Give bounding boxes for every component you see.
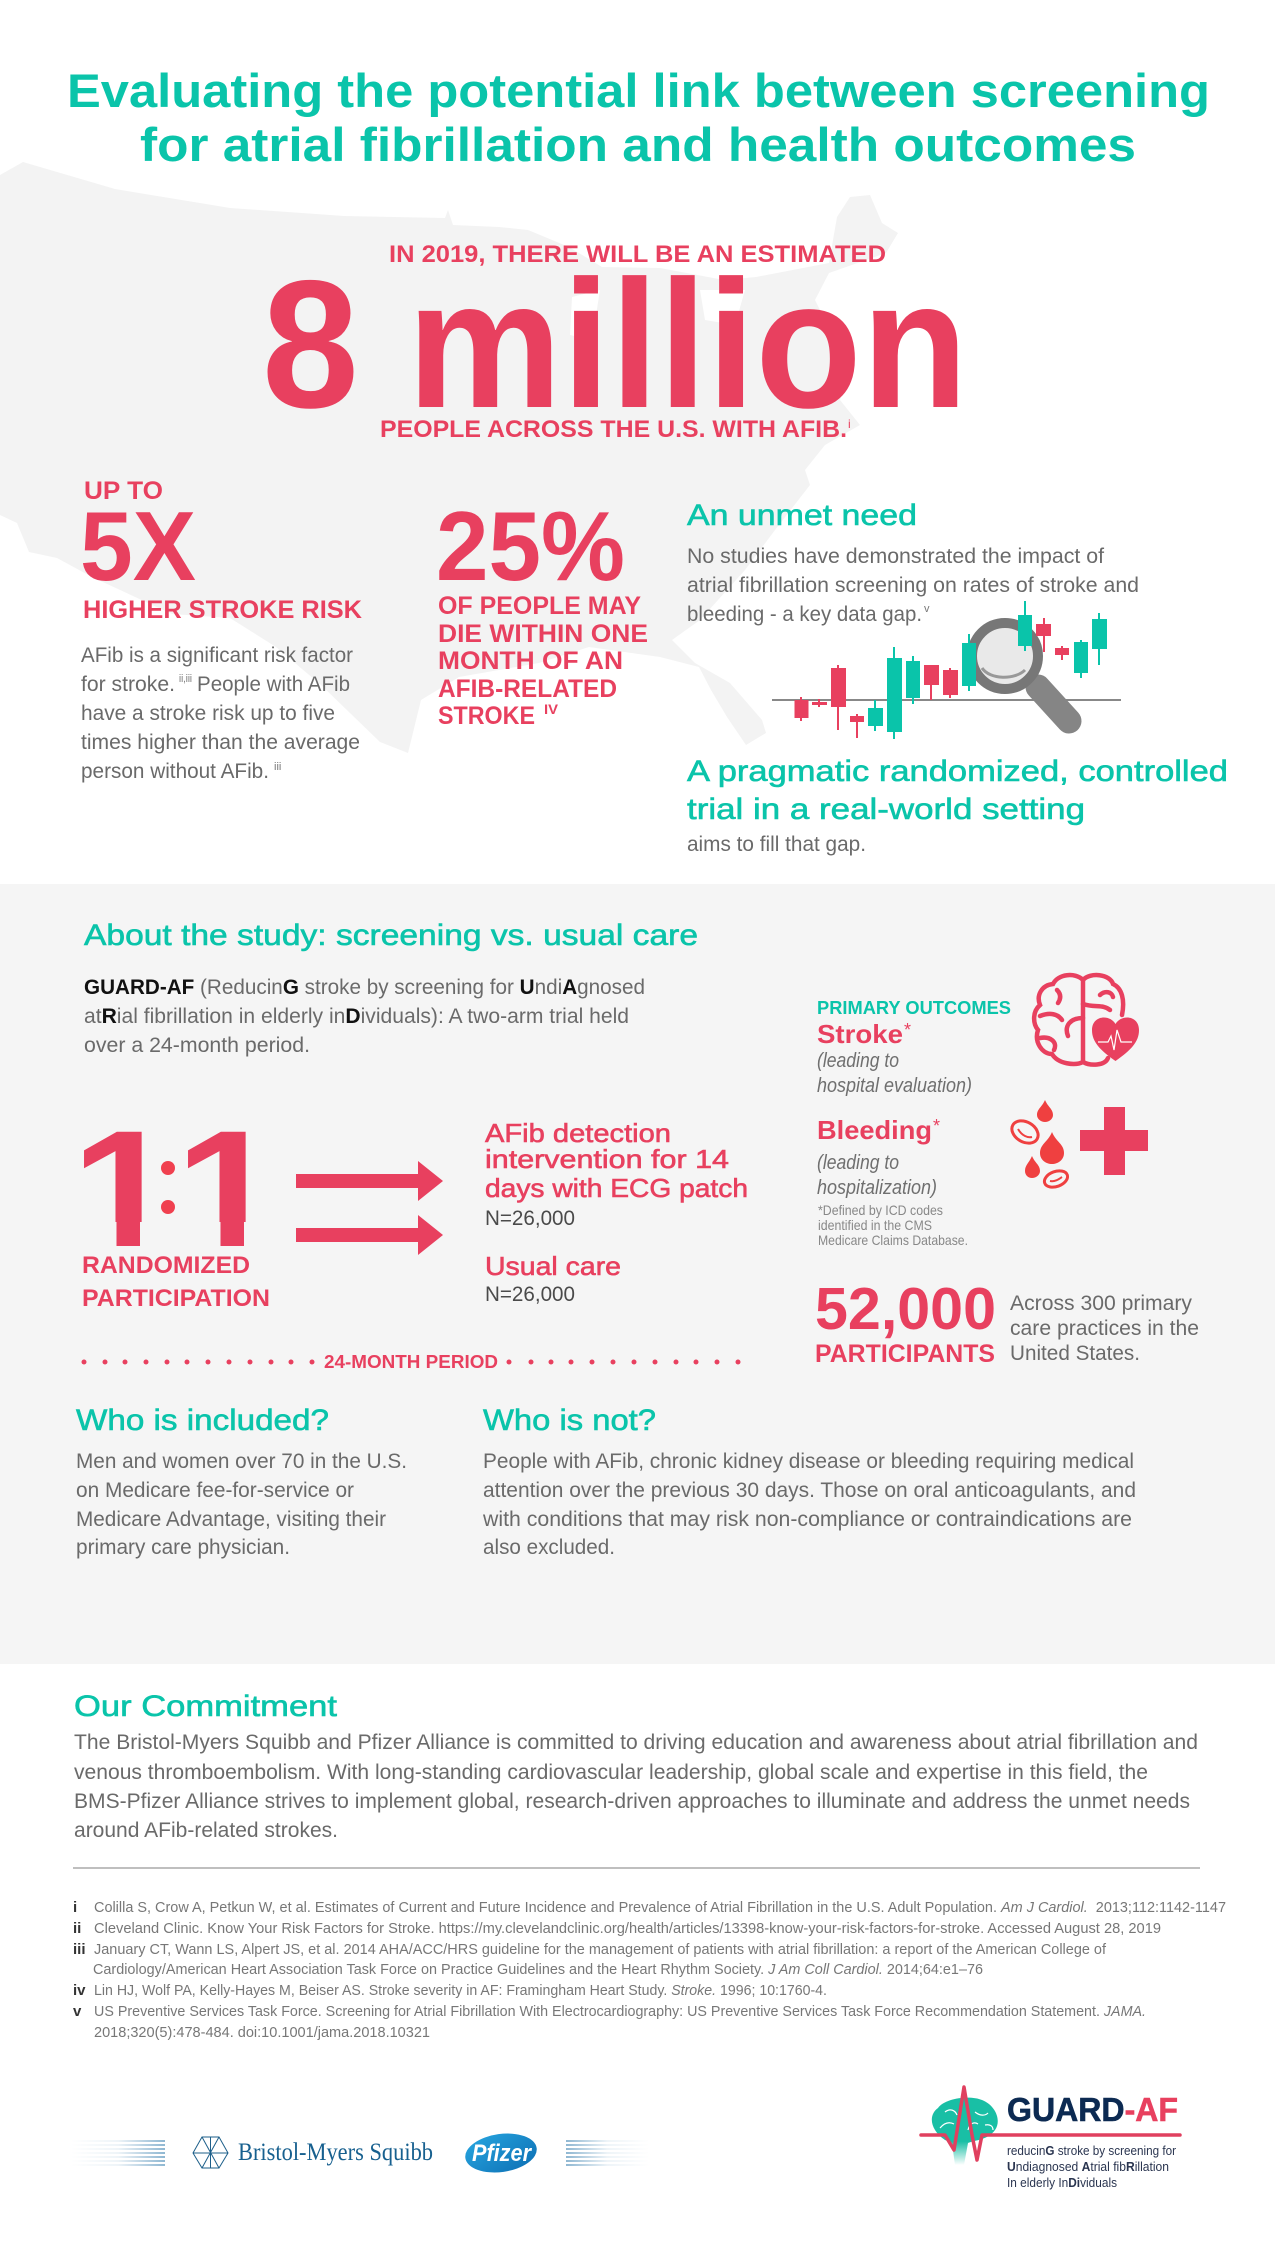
panel: primary outcomes: PRIMARY OUTCOMES xyxy=(817,998,1011,1018)
logo: Bristol-Myers Squibb xyxy=(71,2137,433,2168)
panel: about the study background xyxy=(0,884,1275,1664)
references list: US Preventive Services Task Force. Screening for Atrial Fibrillation With Electrocardiography: US Preventive Services Task Force Recommendation Statement. JAMA. xyxy=(94,2003,1146,2020)
references list: iii xyxy=(73,1941,86,1958)
panel: pragmatic trial: trial in a real-world setting xyxy=(687,793,1085,826)
statistic: 52,000 participants: PARTICIPANTS xyxy=(815,1340,995,1368)
icon: blood drops and cross xyxy=(1008,1100,1148,1190)
logo: GUARD-AF: reducinG stroke by screening for xyxy=(1007,2143,1177,2158)
panel: an unmet need: An unmet need xyxy=(687,499,917,532)
references list: 2018;320(5):478-484. doi:10.1001/jama.2018.10321 xyxy=(94,2024,430,2041)
statistic: 52,000 participants: 52,000 xyxy=(815,1276,996,1342)
panel: pragmatic trial: A pragmatic randomized, controlled xyxy=(687,755,1228,788)
headline statistic: 8 million: 8 million xyxy=(262,242,968,446)
title: Evaluating the potential link between screening xyxy=(67,64,1210,117)
panel: 5X stroke risk: for stroke. xyxy=(81,673,175,696)
logo: Pfizer: Pfizer xyxy=(472,2140,532,2167)
panel: 25% mortality xyxy=(436,491,648,730)
panel: our commitment: around AFib-related strokes. xyxy=(74,1819,338,1842)
panel: an unmet need: No studies have demonstrated the impact of xyxy=(687,545,1104,568)
title xyxy=(67,64,1210,171)
text: GUARD-AF description: over a 24-month period. xyxy=(84,1034,310,1057)
icon: brain and heart xyxy=(1034,975,1139,1065)
panel: 25% mortality: DIE WITHIN ONE xyxy=(438,620,648,648)
headline statistic: 8 million: IN 2019, THERE WILL BE AN ESTIMATED xyxy=(389,241,886,268)
text: trial arms xyxy=(485,1118,748,1306)
timeline: 24-month period: 24-MONTH PERIOD xyxy=(324,1352,498,1372)
logo: GUARD-AF: Undiagnosed Atrial fibRillation xyxy=(1007,2159,1169,2174)
logo: GUARD-AF: In elderly InDividuals xyxy=(1007,2175,1117,2190)
panel: 5X stroke risk: 5X xyxy=(80,491,196,601)
panel: 25% mortality: STROKE xyxy=(438,702,535,730)
statistic: 52,000 participants xyxy=(815,1276,1199,1368)
headline statistic: 8 million: PEOPLE ACROSS THE U.S. WITH AFIB. xyxy=(380,416,847,443)
icon: magnifying glass xyxy=(972,623,1069,721)
panel: pragmatic trial xyxy=(687,755,1228,856)
text: GUARD-AF description xyxy=(84,976,645,1057)
panel: 5X stroke risk: person without AFib. xyxy=(81,760,269,783)
panel: an unmet need: v xyxy=(924,603,930,615)
panel: 5X stroke risk: UP TO xyxy=(84,477,163,505)
references list: Cardiology/American Heart Association Task Force on Practice Guidelines and the Heart Rhythm Society. J Am Coll Cardiol. 2014;64:e1–76 xyxy=(93,1961,983,1978)
references list: Lin HJ, Wolf PA, Kelly-Hayes M, Beiser AS. Stroke severity in AF: Framingham Heart Study. Stroke. 1996; 10:1760-4. xyxy=(94,1982,827,1999)
panel: who is included: primary care physician. xyxy=(76,1536,290,1559)
panel: our commitment xyxy=(74,1690,1198,1842)
statistic: 52,000 participants: United States. xyxy=(1010,1342,1140,1365)
panel: an unmet need xyxy=(687,499,1139,626)
logo: Pfizer xyxy=(463,2129,649,2177)
logo: GUARD-AF xyxy=(921,2087,1180,2190)
references list: January CT, Wann LS, Alpert JS, et al. 2014 AHA/ACC/HRS guideline for the management of patients with atrial fibrillation: a report of the American College of xyxy=(94,1941,1107,1958)
statistic: 1:1 randomized participation: 1 xyxy=(71,1097,177,1282)
timeline: 24-month period xyxy=(82,1352,740,1372)
panel: 5X stroke risk: times higher than the average xyxy=(81,731,360,754)
panel: who is included: Men and women over 70 in the U.S. xyxy=(76,1450,407,1473)
panel: primary outcomes: (leading to xyxy=(817,1152,899,1174)
references list: ii xyxy=(73,1920,81,1937)
panel: 5X stroke risk: AFib is a significant risk factor xyxy=(81,644,353,667)
panel: 5X stroke risk: HIGHER STROKE RISK xyxy=(83,596,362,624)
panel: who is not: also excluded. xyxy=(483,1536,615,1559)
references list: iv xyxy=(73,1982,86,1999)
references list: v xyxy=(73,2003,82,2020)
panel: who is not: People with AFib, chronic kidney disease or bleeding requiring medical xyxy=(483,1450,1134,1473)
text: trial arms: AFib detection xyxy=(485,1118,671,1148)
panel: our commitment: Our Commitment xyxy=(74,1690,338,1723)
panel: 25% mortality: OF PEOPLE MAY xyxy=(438,592,641,620)
panel: 25% mortality: AFIB-RELATED xyxy=(438,675,617,703)
panel: who is not: Who is not? xyxy=(483,1404,656,1437)
panel: primary outcomes: (leading to xyxy=(817,1050,899,1072)
panel: 5X stroke risk xyxy=(80,477,362,783)
panel: who is included: Who is included? xyxy=(76,1404,329,1437)
references list xyxy=(73,1899,1226,2041)
references list: Cleveland Clinic. Know Your Risk Factors for Stroke. https://my.clevelandclinic.org/health/articles/13398-know-your-risk-factors-for-stroke. Accessed August 28, 2019 xyxy=(94,1920,1161,1937)
references list: i xyxy=(73,1899,77,1916)
panel: 5X stroke risk: ii,iii xyxy=(179,673,192,685)
text: trial arms: days with ECG patch xyxy=(485,1173,748,1203)
logo: GUARD-AF: GUARD-AF xyxy=(1007,2091,1178,2128)
heading: about the study: About the study: screening vs. usual care xyxy=(84,919,698,952)
panel: primary outcomes: Bleeding xyxy=(817,1115,932,1145)
arrow: to usual care arm xyxy=(296,1215,443,1255)
panel: who is not: attention over the previous 30 days. Those on oral anticoagulants, and xyxy=(483,1479,1136,1502)
panel: 25% mortality: MONTH OF AN xyxy=(438,647,623,675)
statistic: 1:1 randomized participation: PARTICIPATION xyxy=(82,1285,270,1312)
panel: who is not xyxy=(482,1404,1136,1559)
panel: an unmet need: atrial fibrillation screening on rates of stroke and xyxy=(687,574,1139,597)
panel: an unmet need: bleeding - a key data gap. xyxy=(687,603,922,626)
title: for atrial fibrillation and health outcomes xyxy=(140,118,1136,171)
panel: primary outcomes: *Defined by ICD codes xyxy=(818,1202,943,1218)
panel: who is not: with conditions that may risk non-compliance or contraindications are xyxy=(482,1508,1132,1531)
panel: who is included xyxy=(76,1404,407,1559)
statistic: 52,000 participants: Across 300 primary xyxy=(1010,1292,1193,1315)
panel: primary outcomes: Medicare Claims Database. xyxy=(818,1232,968,1248)
panel: primary outcomes: Stroke xyxy=(817,1019,903,1049)
statistic: 1:1 randomized participation: RANDOMIZED xyxy=(82,1252,250,1279)
statistic: 1:1 randomized participation: 1 xyxy=(175,1097,281,1282)
panel: 5X stroke risk: People with AFib xyxy=(197,673,350,696)
text: GUARD-AF description: GUARD-AF (ReducinG stroke by screening for UndiAgnosed xyxy=(84,976,645,999)
headline statistic: 8 million: i xyxy=(848,417,851,431)
panel: primary outcomes: hospital evaluation) xyxy=(817,1075,972,1097)
panel: 25% mortality: 25% xyxy=(436,491,625,601)
panel: our commitment: The Bristol-Myers Squibb and Pfizer Alliance is committed to driving education and awareness about atrial fibrillation and xyxy=(74,1731,1198,1754)
panel: primary outcomes: hospitalization) xyxy=(817,1177,937,1199)
panel: our commitment: venous thromboembolism. With long-standing cardiovascular leadership, global scale and expertise in this field, the xyxy=(74,1761,1148,1784)
panel: 5X stroke risk: have a stroke risk up to five xyxy=(81,702,335,725)
arrow: to intervention arm xyxy=(296,1161,443,1201)
chart: candlestick with magnifying glass xyxy=(772,601,1121,739)
panel: 25% mortality: IV xyxy=(544,701,559,717)
panel: pragmatic trial: aims to fill that gap. xyxy=(687,833,866,856)
logo: Bristol-Myers Squibb: Bristol-Myers Squibb xyxy=(238,2139,433,2166)
panel: primary outcomes: * xyxy=(933,1116,940,1136)
references list: Colilla S, Crow A, Petkun W, et al. Estimates of Current and Future Incidence and Prevalence of Atrial Fibrillation in the U.S. Adult Population. Am J Cardiol. 2013;112:1142-1147 xyxy=(94,1899,1226,1916)
panel: who is included: on Medicare fee-for-service or xyxy=(76,1479,354,1502)
text: trial arms: N=26,000 xyxy=(485,1207,575,1230)
text: GUARD-AF description: atRial fibrillation in elderly inDividuals): A two-arm trial held xyxy=(84,1005,629,1028)
panel: primary outcomes xyxy=(817,998,1011,1248)
panel: primary outcomes: * xyxy=(904,1020,911,1040)
background: U.S. map silhouette xyxy=(0,162,898,753)
panel: primary outcomes: identified in the CMS xyxy=(818,1217,932,1233)
text: trial arms: N=26,000 xyxy=(485,1283,575,1306)
panel: our commitment: BMS-Pfizer Alliance strives to implement global, research-driven approaches to illuminate and address the unmet needs xyxy=(74,1790,1190,1813)
panel: who is included: Medicare Advantage, visiting their xyxy=(76,1508,386,1531)
text: trial arms: Usual care xyxy=(485,1251,621,1281)
statistic: 1:1 randomized participation xyxy=(84,1132,268,1306)
statistic: 52,000 participants: care practices in the xyxy=(1010,1317,1199,1340)
text: trial arms: intervention for 14 xyxy=(485,1144,729,1174)
panel: 5X stroke risk: iii xyxy=(274,761,281,773)
